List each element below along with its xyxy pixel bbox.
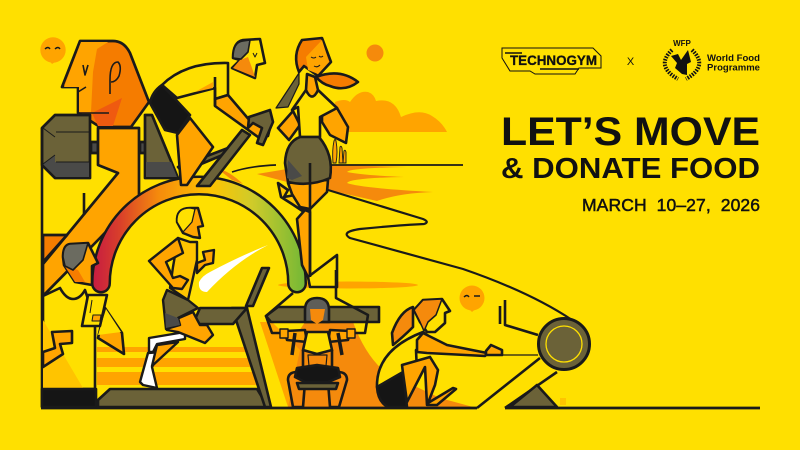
sleeve line — [214, 77, 216, 106]
shorts — [377, 372, 407, 407]
flywheel — [538, 318, 590, 370]
head — [232, 39, 265, 78]
machine bar — [266, 307, 379, 322]
white swoosh — [199, 245, 268, 292]
face — [306, 40, 329, 74]
logo: world food programme — [665, 39, 760, 79]
arm — [98, 308, 124, 354]
small mark — [560, 398, 566, 405]
standing woman — [276, 38, 358, 287]
handlebar — [248, 110, 273, 145]
logo outline — [502, 48, 601, 74]
left lake — [218, 169, 287, 184]
date: MARCH 10–27, 2026 — [582, 195, 760, 215]
subtitle: & DONATE FOOD — [501, 153, 760, 185]
calf — [152, 342, 178, 366]
org name: World Food — [707, 53, 760, 64]
front sock — [149, 332, 185, 352]
orange triangle — [43, 235, 67, 262]
arms — [285, 330, 350, 342]
shirt shading — [195, 82, 213, 92]
title: LET’S MOVE — [501, 110, 760, 154]
facial lines — [78, 62, 120, 113]
trees — [333, 140, 346, 163]
logo: technogym — [502, 48, 601, 74]
console — [193, 308, 247, 324]
torso — [170, 238, 197, 300]
shorts shadow — [165, 313, 180, 328]
body — [43, 288, 95, 389]
left panel line — [42, 128, 84, 407]
ponytail — [392, 307, 413, 345]
rails — [477, 358, 557, 408]
hair — [296, 38, 331, 76]
sun — [366, 44, 384, 62]
lower leg — [297, 210, 310, 277]
orange hill — [288, 322, 473, 407]
shorts — [163, 290, 198, 329]
left arm — [278, 111, 300, 140]
handles — [292, 333, 342, 355]
cheek — [64, 265, 85, 282]
logo wordmark: TECHNOGYM — [510, 52, 597, 68]
wheat and hand emblem — [671, 50, 691, 75]
back foot spikes — [278, 183, 304, 212]
face — [310, 309, 325, 324]
thigh — [177, 118, 213, 185]
cheek — [233, 57, 255, 77]
speech bubble: rower — [460, 286, 484, 312]
cyclist — [150, 39, 273, 186]
cloud — [335, 92, 447, 132]
shorts — [285, 137, 331, 184]
book stripes — [90, 300, 101, 321]
hair — [177, 208, 195, 232]
track stripes — [97, 347, 262, 385]
torso — [162, 63, 228, 99]
neck — [306, 74, 318, 96]
deck — [98, 389, 268, 407]
dumbbell right dark band — [146, 162, 177, 177]
centre line — [309, 163, 311, 277]
weight bar — [276, 73, 299, 108]
upper arm light — [98, 309, 121, 335]
hair — [63, 243, 88, 270]
eye — [253, 53, 257, 57]
facial features — [311, 56, 323, 67]
chest press machine and woman — [266, 270, 379, 407]
cable — [500, 354, 538, 356]
rowing machine — [477, 300, 590, 408]
hair — [414, 299, 442, 331]
dumbbell details — [43, 128, 89, 164]
flywheel ring — [546, 326, 582, 362]
arch outline — [101, 186, 297, 284]
head — [414, 299, 450, 332]
arm — [215, 95, 270, 137]
shorts shadow — [287, 160, 302, 180]
dumbbell left dark band — [43, 155, 89, 177]
hair — [305, 298, 329, 322]
dumbbell left weight — [42, 115, 90, 178]
seat back lines — [303, 350, 332, 366]
dumbbell right weight — [145, 115, 178, 178]
upright — [232, 308, 271, 407]
separator x: X — [627, 56, 635, 68]
orange lake — [328, 165, 433, 201]
amber hill — [260, 322, 300, 407]
wreath — [665, 50, 699, 79]
midriff — [308, 355, 327, 366]
leg — [402, 357, 456, 405]
book — [82, 295, 107, 326]
background landscape — [97, 44, 572, 407]
foot — [308, 255, 337, 287]
logo accent lines — [505, 53, 579, 69]
body shade — [43, 320, 83, 388]
horizon line — [232, 165, 463, 172]
forearm — [197, 250, 214, 273]
neck shadow — [92, 98, 122, 126]
thighs — [288, 180, 328, 209]
console screen — [246, 268, 269, 306]
right arm — [322, 108, 348, 143]
base block — [42, 389, 96, 407]
stand — [510, 385, 557, 407]
head — [177, 208, 203, 238]
ground shadow — [278, 282, 418, 288]
bike frame — [178, 148, 228, 172]
rower — [377, 299, 502, 407]
left man with book — [42, 243, 124, 407]
hand — [486, 345, 502, 355]
hands — [280, 329, 355, 338]
fist and forearm — [43, 331, 72, 367]
back sock and foot — [140, 352, 160, 388]
shorts — [150, 85, 190, 133]
handle post — [500, 300, 538, 335]
ponytail — [316, 73, 358, 88]
seat — [297, 383, 338, 389]
back arm — [149, 238, 188, 289]
torso — [377, 332, 438, 388]
wfp label: WFP — [673, 39, 692, 48]
dumbbell bar — [91, 142, 146, 153]
winding road — [328, 190, 572, 320]
bald man with dumbbell — [42, 41, 178, 407]
gauge arch — [101, 186, 297, 284]
calf — [178, 137, 199, 153]
runner — [140, 208, 214, 388]
bra — [303, 332, 332, 354]
torso — [292, 90, 337, 137]
raised arm — [43, 128, 139, 296]
org name second line: Programme — [707, 62, 760, 74]
face light side — [64, 42, 108, 112]
arch colour band — [101, 186, 297, 284]
head — [63, 243, 98, 285]
treadmill — [98, 268, 271, 407]
shorts — [295, 365, 340, 382]
hair — [233, 40, 250, 59]
thigh — [167, 312, 213, 343]
legs — [288, 372, 347, 407]
ground line — [41, 407, 760, 409]
head — [62, 41, 149, 127]
bike post — [197, 130, 250, 186]
machine frame — [266, 270, 368, 333]
speech bubble: bald man — [40, 37, 66, 64]
arm — [417, 333, 487, 356]
